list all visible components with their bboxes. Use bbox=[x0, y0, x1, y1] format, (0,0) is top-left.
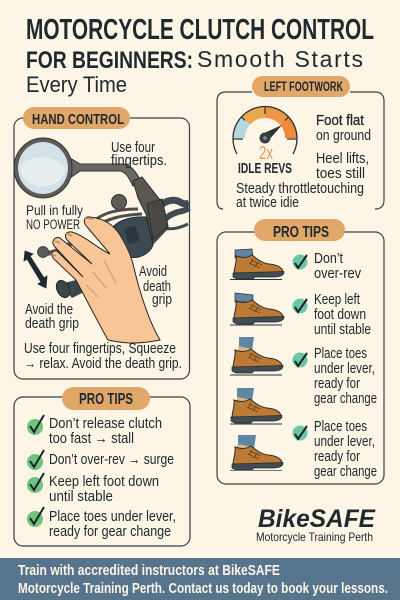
callout: avoid the death grip left: death grip bbox=[25, 316, 79, 332]
heading: pro tips: PRO TIPS bbox=[273, 224, 329, 241]
heading: left footwork: LEFT FOOTWORK bbox=[264, 79, 343, 94]
boot 1 bbox=[230, 249, 284, 280]
hand bbox=[51, 217, 160, 343]
tip: keep left foot down: until stable bbox=[49, 488, 113, 505]
text: foot flat: on ground bbox=[316, 128, 371, 144]
callout: avoid the death grip left bbox=[25, 302, 79, 332]
tip: place toes 2: under lever, bbox=[314, 434, 375, 450]
tip: don't release clutch bbox=[27, 415, 162, 447]
tip: place toes 1: Place toes bbox=[314, 346, 367, 362]
text: heel lifts bbox=[316, 151, 369, 182]
tip: keep left foot down: until stable bbox=[314, 322, 371, 338]
tip: place toes: Place toes under lever, bbox=[49, 508, 176, 525]
tip: keep left foot down: foot down bbox=[314, 307, 366, 323]
tip: place toes 2: gear change bbox=[314, 464, 377, 480]
boot 4 bbox=[230, 388, 282, 424]
callout: avoid death grip right: Avoid bbox=[139, 264, 167, 280]
heading: pro tips bbox=[62, 387, 150, 410]
title bbox=[26, 14, 374, 97]
text: steady throttle: Steady throttletouching bbox=[236, 181, 364, 197]
logo: BikeSAFE: BikeSAFE bbox=[258, 505, 376, 533]
callout: use four fingertips: fingertips. bbox=[111, 153, 167, 169]
tip: place toes: ready for gear change bbox=[49, 523, 171, 540]
text: steady throttle bbox=[236, 181, 364, 211]
callout: avoid death grip right bbox=[139, 264, 172, 308]
footer banner bbox=[0, 558, 400, 600]
mirror bbox=[14, 138, 141, 198]
heading: left footwork bbox=[252, 76, 350, 97]
throttle grip and bars bbox=[92, 177, 189, 257]
heading: hand control bbox=[23, 107, 130, 129]
heading: hand control: HAND CONTROL bbox=[32, 111, 124, 128]
tip: keep left foot down: Keep left foot down bbox=[49, 473, 159, 490]
callout: avoid death grip right: death bbox=[143, 279, 171, 295]
title: Smooth Starts bbox=[197, 46, 363, 72]
caption bbox=[24, 341, 182, 372]
boot 2 bbox=[230, 293, 284, 325]
heading: pro tips bbox=[254, 219, 345, 241]
direction arrow bbox=[24, 251, 47, 288]
tip: keep left foot down: Keep left bbox=[314, 292, 360, 308]
tip: keep left foot down bbox=[292, 292, 371, 338]
tip: keep left foot down bbox=[27, 473, 159, 505]
text: foot flat: Foot flat bbox=[316, 113, 364, 129]
boot 5 bbox=[230, 435, 283, 470]
title: Every Time bbox=[26, 72, 127, 97]
title: FOR BEGINNERS: bbox=[26, 47, 193, 74]
panel: hand control bbox=[14, 107, 190, 379]
tip: place toes 2 bbox=[292, 419, 377, 480]
heading: pro tips: PRO TIPS bbox=[79, 391, 133, 408]
illustration: handlebar, mirror and hand bbox=[14, 138, 189, 343]
tip: don't over-rev: Don’t bbox=[314, 251, 343, 267]
tip: place toes 1: gear change bbox=[314, 391, 377, 407]
gauge: idle revs: 2x bbox=[259, 143, 273, 163]
clutch lever ball and bar end bbox=[38, 240, 84, 300]
panel: left footwork bbox=[217, 76, 384, 211]
callout: use four fingertips bbox=[111, 140, 167, 169]
tip: place toes 1: ready for bbox=[314, 376, 360, 392]
boot 3 bbox=[230, 337, 283, 375]
tip: place toes 1: under lever, bbox=[314, 361, 375, 377]
text: heel lifts: toes still bbox=[316, 166, 365, 182]
tip: don't over-rev: over-rev bbox=[314, 266, 362, 282]
gauge: idle revs: IDLE REVS bbox=[238, 161, 292, 177]
callout: avoid the death grip left: Avoid the bbox=[25, 302, 73, 318]
tip: don't over-rev bbox=[292, 251, 362, 282]
callout: pull in fully: Pull in fully bbox=[26, 202, 83, 218]
callout: avoid death grip right: grip bbox=[152, 292, 172, 308]
tip: place toes 2: ready for bbox=[314, 449, 360, 465]
tip: don't release clutch: too fast → stall bbox=[49, 430, 134, 447]
tip: place toes bbox=[27, 507, 176, 540]
tip: place toes 2: Place toes bbox=[314, 419, 367, 435]
callout: pull in fully bbox=[26, 202, 83, 232]
text: steady throttle: at twice idie bbox=[236, 195, 299, 211]
text: heel lifts: Heel lifts, bbox=[316, 151, 369, 167]
footer banner: Train with accredited instructors at BikeSAFE bbox=[18, 563, 280, 579]
tip: place toes 1 bbox=[292, 346, 377, 407]
tip: don't over-rev bbox=[27, 450, 174, 470]
callout: pull in fully: NO POWER bbox=[26, 217, 80, 232]
caption: → relax. Avoid the death grip. bbox=[24, 356, 182, 372]
gauge: idle revs bbox=[233, 106, 297, 177]
callout: use four fingertips: Use four bbox=[111, 140, 155, 156]
logo: BikeSAFE: Motorcycle Training Perth bbox=[256, 530, 373, 544]
panel: pro tips right bbox=[217, 219, 384, 484]
tip: don't over-rev: Don’t over-rev → surge bbox=[49, 451, 174, 468]
caption: Use four fingertips, Squeeze bbox=[24, 341, 176, 357]
panel: pro tips left bbox=[14, 387, 190, 546]
text: foot flat bbox=[316, 113, 371, 144]
tip: don't release clutch: Don’t release clutch bbox=[49, 415, 162, 432]
